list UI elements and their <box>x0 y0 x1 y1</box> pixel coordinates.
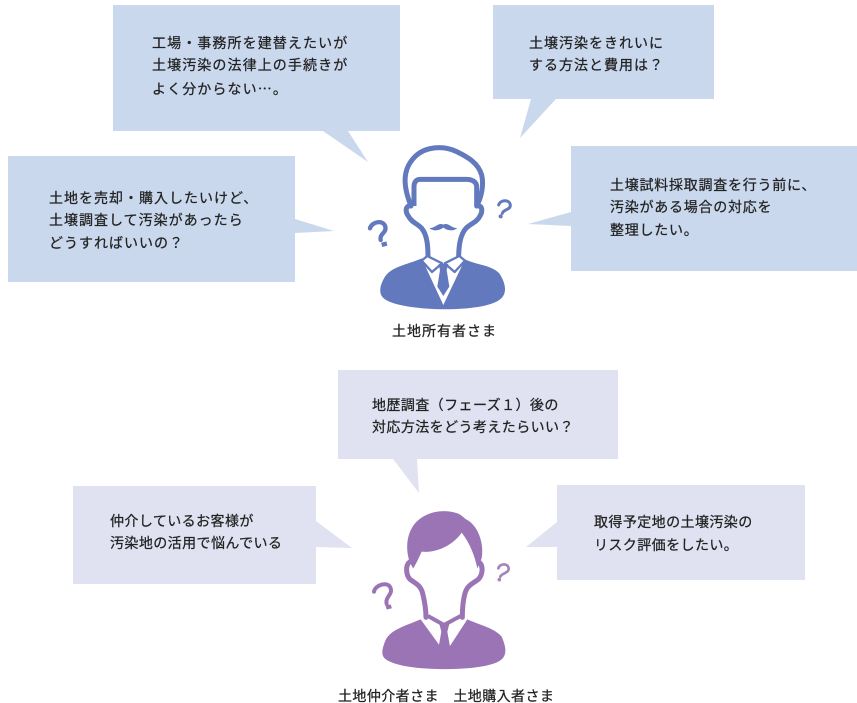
speech bubble: site history: 対応方法をどう考えたらいい？ <box>372 419 574 435</box>
speech bubble: risk assessment <box>526 485 805 580</box>
icon: broker and buyer <box>374 511 509 669</box>
speech bubble: broker's client: 仲介しているお客様が <box>110 513 254 529</box>
speech bubble: buying and selling <box>8 156 334 282</box>
icon: land owner with moustache <box>370 148 510 309</box>
speech bubble: buying and selling: どうすればいいの？ <box>49 235 184 251</box>
speech bubble: buying and selling: 土壌調査して汚染があったら <box>49 212 244 228</box>
speech bubble: risk assessment: 取得予定地の土壌汚染の <box>594 514 753 530</box>
speech bubble: procedures: 土壌汚染の法律上の手続きが <box>152 57 348 73</box>
speech bubble: before sampling: 汚染がある場合の対応を <box>610 199 772 215</box>
label: land owner: 土地所有者さま <box>392 323 497 339</box>
speech bubble: site history <box>338 370 618 493</box>
speech bubble: cleanup cost: 土壌汚染をきれいに <box>529 35 664 51</box>
speech bubble: before sampling <box>528 146 857 271</box>
speech bubble: broker's client <box>73 486 352 584</box>
speech bubble: cleanup cost: する方法と費用は？ <box>529 57 664 73</box>
speech bubble: procedures: よく分からない…。 <box>152 79 288 99</box>
speech bubble: risk assessment: リスク評価をしたい。 <box>594 537 738 553</box>
speech bubble: broker's client: 汚染地の活用で悩んでいる <box>110 535 282 551</box>
speech bubble: cleanup cost <box>493 5 714 138</box>
speech bubble: before sampling: 整理したい。 <box>610 222 698 238</box>
speech bubble: buying and selling: 土地を売却・購入したいけど、 <box>49 190 258 206</box>
speech bubble: before sampling: 土壌試料採取調査を行う前に、 <box>610 177 816 193</box>
speech bubble: site history: 地歴調査（フェーズ１）後の <box>372 397 559 413</box>
speech bubble: procedures: 工場・事務所を建替えたいが <box>152 35 348 51</box>
speech bubble: procedures <box>113 5 400 162</box>
